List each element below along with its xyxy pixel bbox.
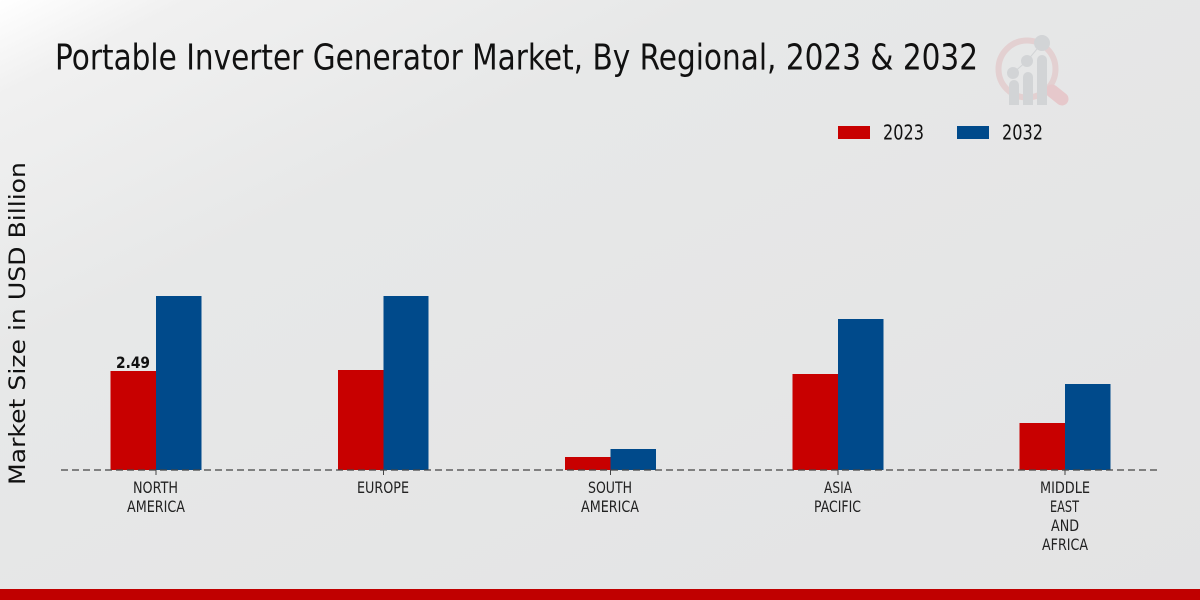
bar chart bbox=[61, 296, 1160, 475]
label: Asia Pacific: PACIFIC bbox=[814, 497, 861, 516]
label: Middle East and Africa: MIDDLE bbox=[1040, 478, 1090, 497]
label: South America bbox=[581, 478, 639, 516]
label: Middle East and Africa: AND bbox=[1051, 516, 1079, 535]
y axis label: Market Size in USD Billion bbox=[5, 162, 31, 485]
legend: 2023 bbox=[838, 120, 924, 144]
label: North America: AMERICA bbox=[127, 497, 185, 516]
footer bar bbox=[0, 589, 1200, 600]
label: Middle East and Africa: AFRICA bbox=[1042, 535, 1088, 554]
legend bbox=[838, 120, 1043, 144]
bars: South America bbox=[565, 449, 656, 470]
label: Middle East and Africa bbox=[1040, 478, 1090, 554]
label: North America bbox=[127, 478, 185, 516]
bars: North America bbox=[110, 296, 202, 470]
x axis labels bbox=[127, 478, 1090, 554]
label: South America: SOUTH bbox=[588, 478, 632, 497]
bars: Asia Pacific bbox=[792, 319, 884, 470]
bars: Europe bbox=[338, 296, 428, 470]
label: Middle East and Africa: EAST bbox=[1050, 497, 1079, 516]
title: Portable Inverter Generator Market, By Regional, 2023 & 2032 bbox=[55, 38, 978, 78]
label: Asia Pacific bbox=[814, 478, 861, 516]
bars: Middle East and Africa bbox=[1020, 384, 1110, 470]
legend: 2032: 2032 bbox=[1002, 120, 1043, 144]
icon: magnifier logo bbox=[998, 35, 1062, 105]
label: Asia Pacific: ASIA bbox=[824, 478, 852, 497]
label: South America: AMERICA bbox=[581, 497, 639, 516]
baseline bbox=[61, 469, 1160, 471]
value label: 2.49 bbox=[116, 353, 150, 372]
legend: 2032 bbox=[957, 120, 1043, 144]
label: North America: NORTH bbox=[133, 478, 178, 497]
label: Europe: EUROPE bbox=[357, 478, 409, 497]
legend: 2023: 2023 bbox=[883, 120, 924, 144]
